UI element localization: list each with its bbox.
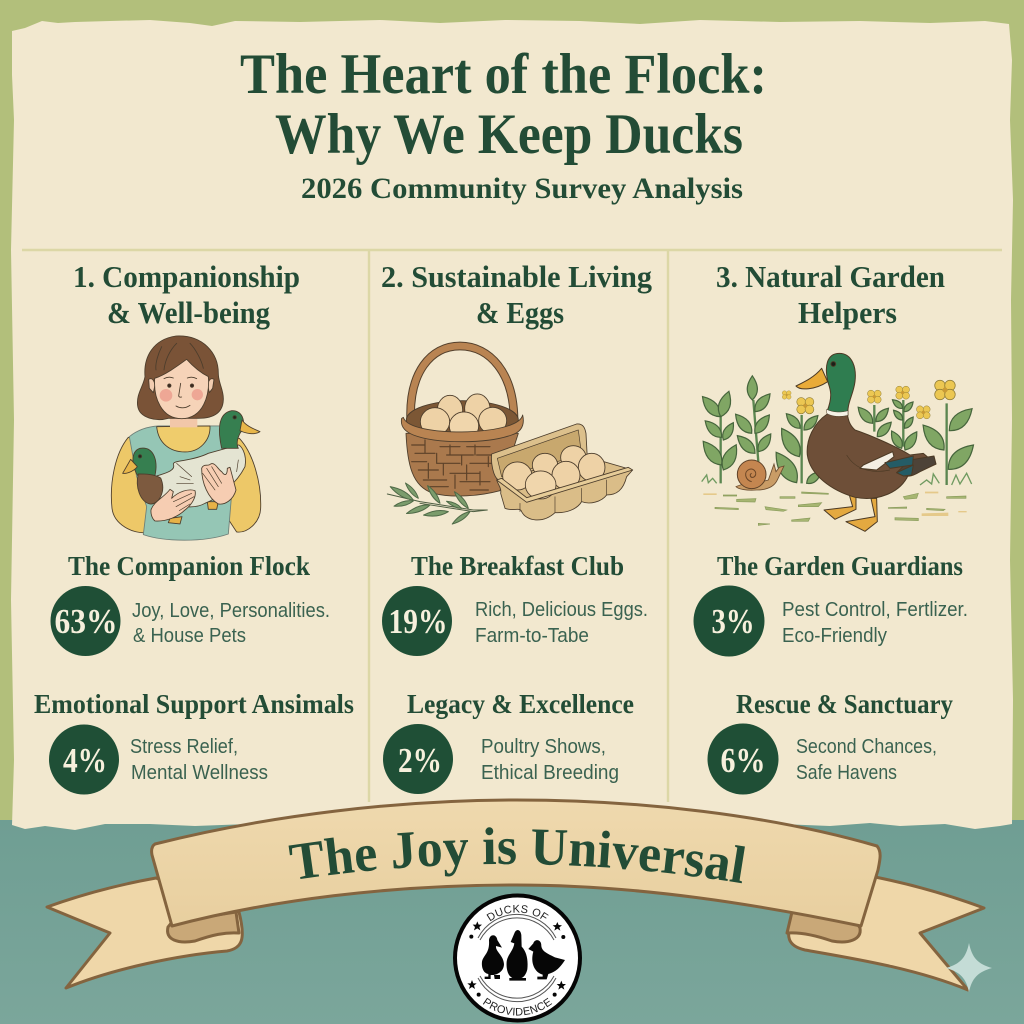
badge 3%: 3% [712,602,754,641]
heading: sustainable living [381,259,652,330]
description [132,600,330,647]
badge 2%: 2% [398,741,442,780]
panel: sustainable living [381,259,652,794]
stat: rescue [708,688,953,794]
title line 1: The Heart of the Flock: [240,43,767,106]
stat: legacy [383,688,634,794]
description: Poultry Shows, [481,736,606,758]
description: & House Pets [133,625,246,647]
heading: garden helpers: Helpers [798,295,897,330]
badge 6% [708,724,778,794]
badge 63% [50,586,120,656]
description: Pest Control, Fertlizer. [782,599,968,621]
ribbon banner [46,798,986,992]
panel: garden helpers [694,259,979,794]
description: Eco-Friendly [782,625,887,647]
title line 2: Why We Keep Ducks [275,103,743,166]
stat: breakfast club [382,550,648,656]
subheading: The Breakfast Club [411,550,624,581]
description [481,736,619,784]
badge 4% [49,724,119,794]
illustration: egg basket and carton [387,346,633,526]
description [130,736,268,784]
heading: garden helpers: 3. Natural Garden [716,259,945,294]
badge 6%: 6% [720,741,766,780]
panel: companionship [34,259,354,794]
title block [240,43,767,205]
ribbon left tail [47,878,242,988]
sparkle [946,943,992,992]
ribbon main band [152,800,880,926]
badge 63%: 63% [54,602,118,641]
badge 19% [382,586,452,656]
ribbon left curl [168,912,239,942]
badge 4%: 4% [63,741,107,780]
ribbon right tail [788,877,984,990]
heading: companionship: 1. Companionship [73,259,300,294]
badge 3% [694,586,764,656]
description: Mental Wellness [131,762,268,784]
description: Second Chances, [796,736,937,758]
heading: garden helpers [716,259,945,330]
teal lower band [0,820,1024,1024]
logo duck silhouettes [467,921,566,997]
description [475,599,648,647]
heading: companionship: & Well-being [107,295,270,330]
stat: garden guardians [694,550,968,656]
heading: sustainable living: 2. Sustainable Living [381,259,652,294]
logo: ducks of providence [453,894,582,1022]
heading: sustainable living: & Eggs [476,295,564,330]
subheading: The Garden Guardians [717,550,963,581]
ribbon text: The Joy is Universal [288,827,745,884]
badge 19%: 19% [388,602,448,641]
description: Stress Relief, [130,736,238,758]
logo text top: DUCKS OF [486,904,549,922]
description: Safe Havens [796,762,897,784]
logo text bottom: PROVIDENCE [482,998,552,1016]
subheading: Emotional Support Ansimals [34,688,354,719]
description: Joy, Love, Personalities. [132,600,330,622]
subtitle: 2026 Community Survey Analysis [301,172,743,205]
description: Ethical Breeding [481,762,619,784]
illustration: duck in the garden [698,353,979,531]
heading: companionship [73,259,300,330]
description: Farm-to-Tabe [475,625,589,647]
ribbon right curl [787,912,860,942]
subheading: The Companion Flock [68,550,311,581]
description: Rich, Delicious Eggs. [475,599,648,621]
subheading: Rescue & Sanctuary [736,688,953,719]
badge 2% [383,724,453,794]
stat: emotional support [34,688,354,794]
stat: the companion flock [50,550,330,656]
subheading: Legacy & Excellence [407,688,634,719]
paper panel [11,20,1013,830]
description [782,599,968,647]
description [796,736,937,784]
illustration: woman holding ducks [111,336,261,540]
